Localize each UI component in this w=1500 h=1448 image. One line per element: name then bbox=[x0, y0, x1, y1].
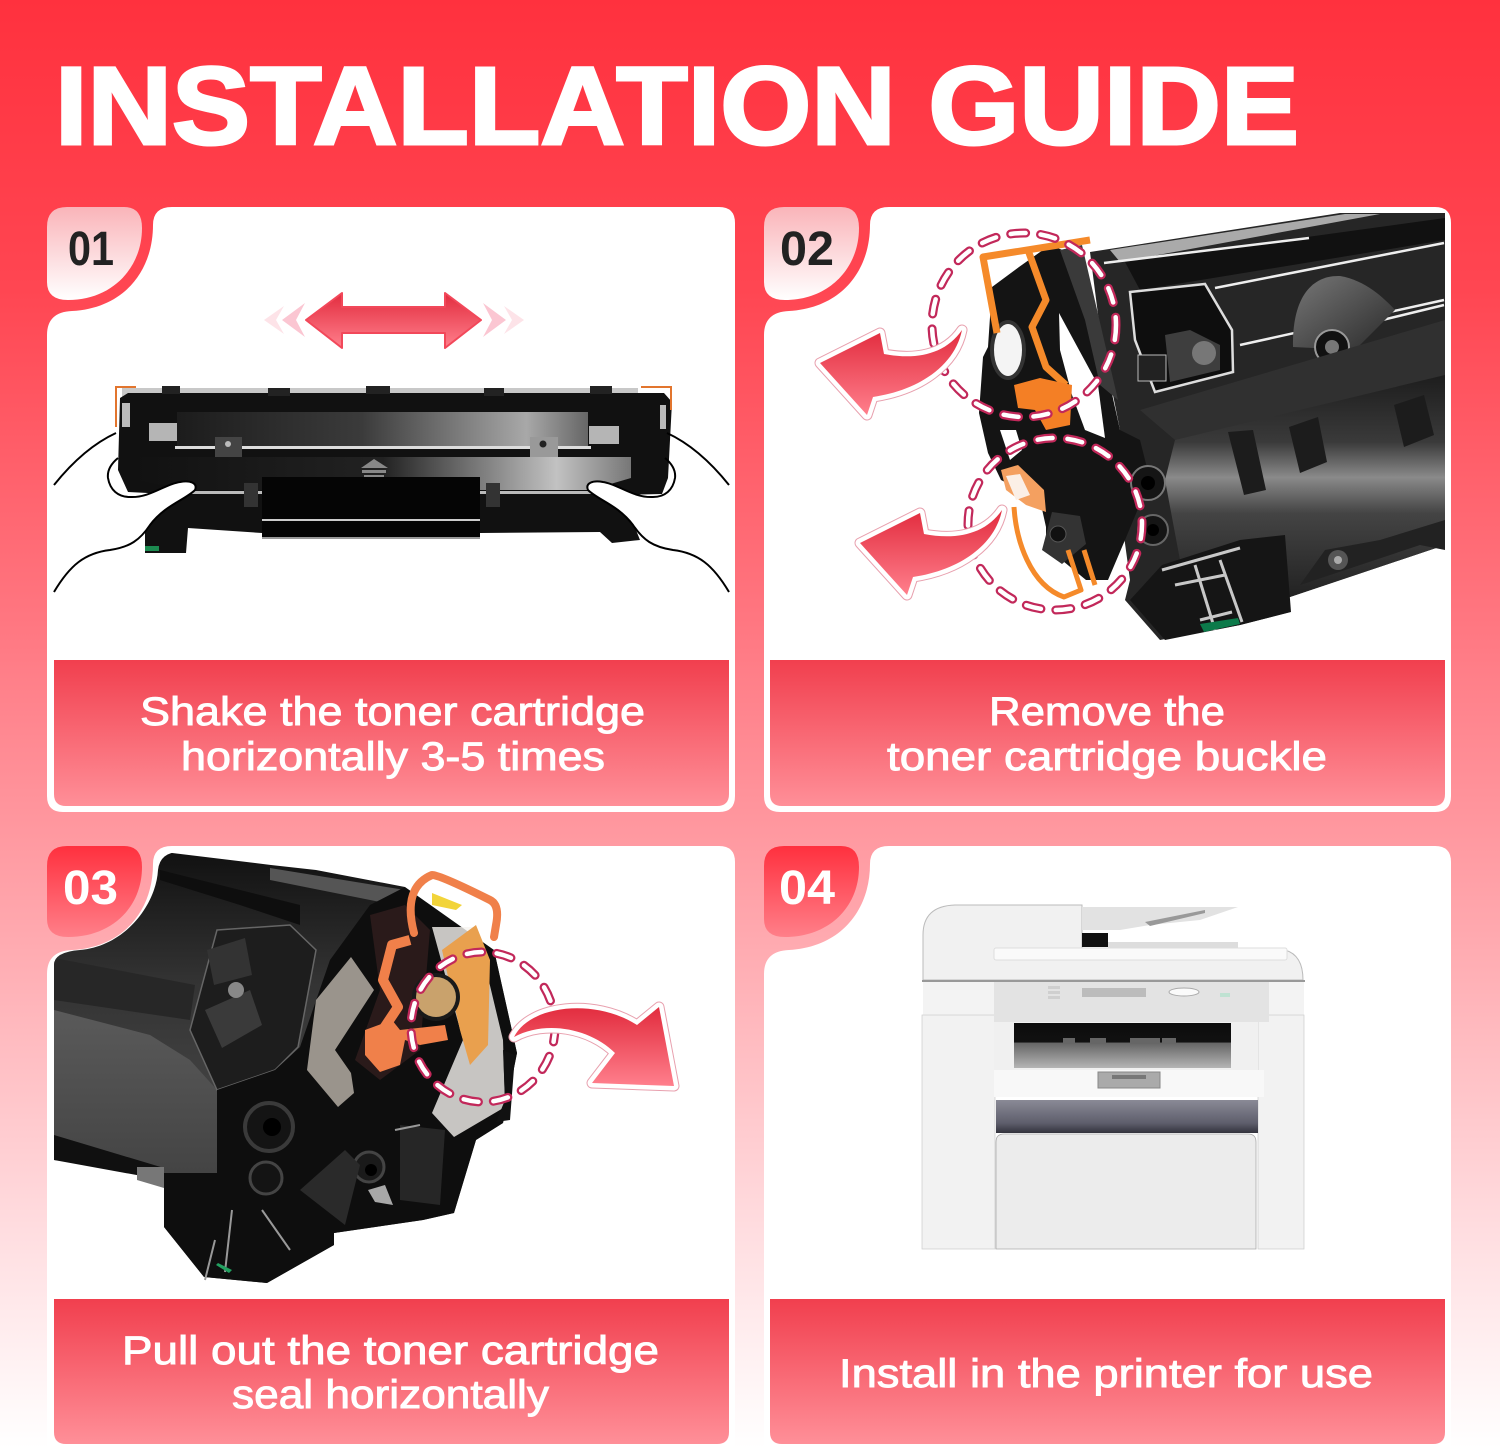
number badge 02 bbox=[764, 207, 859, 300]
cartridge with orange buckle bbox=[979, 213, 1445, 640]
caption bar 04 bbox=[770, 1299, 1445, 1444]
panel: step 02 remove buckle bbox=[764, 207, 1451, 812]
card shape 02 bbox=[764, 207, 1451, 812]
dashed highlight circles bbox=[932, 233, 1142, 610]
arrow: pull seal right bbox=[514, 1007, 674, 1086]
card shape 03 bbox=[47, 846, 735, 1448]
arrow: pull left lower bbox=[860, 510, 1002, 595]
hand: left bbox=[47, 433, 196, 592]
caption bar 02: toner cartridge buckle bbox=[887, 735, 1327, 779]
caption bar 02 bbox=[770, 660, 1445, 806]
icon: double-headed shake arrow bbox=[264, 293, 524, 348]
panel: step 01 shake bbox=[47, 207, 735, 812]
hand: right bbox=[587, 433, 735, 592]
number badge 02: 02 bbox=[780, 223, 834, 276]
dashed highlight circle bbox=[411, 952, 555, 1102]
caption bar 02: Remove the bbox=[989, 690, 1225, 734]
caption bar 01: Shake the toner cartridge bbox=[140, 690, 645, 734]
number badge 01 bbox=[47, 207, 142, 300]
number badge 04: 04 bbox=[779, 862, 835, 915]
caption bar 03 bbox=[54, 1299, 729, 1444]
printer bbox=[922, 905, 1305, 1249]
arrow: pull left upper bbox=[820, 330, 962, 415]
cartridge held in hands bbox=[116, 386, 672, 553]
orange pull ring and clear tape bbox=[365, 875, 515, 1137]
cartridge with seal tape bbox=[54, 852, 517, 1283]
panel: step 04 install bbox=[764, 846, 1451, 1448]
card shape 04 bbox=[764, 846, 1451, 1448]
number badge 03: 03 bbox=[63, 862, 118, 915]
panel: step 03 pull seal bbox=[47, 846, 735, 1448]
caption bar 03: seal horizontally bbox=[232, 1373, 549, 1417]
caption bar 01 bbox=[54, 660, 729, 806]
number badge 04 bbox=[764, 846, 859, 937]
title: INSTALLATION GUIDE bbox=[55, 45, 1299, 168]
caption bar 03: Pull out the toner cartridge bbox=[122, 1329, 659, 1373]
number badge 01: 01 bbox=[68, 223, 114, 276]
card shape 01 bbox=[47, 207, 735, 812]
caption bar 01: horizontally 3-5 times bbox=[181, 735, 605, 779]
number badge 03 bbox=[47, 846, 142, 937]
caption bar 04: Install in the printer for use bbox=[839, 1352, 1373, 1396]
